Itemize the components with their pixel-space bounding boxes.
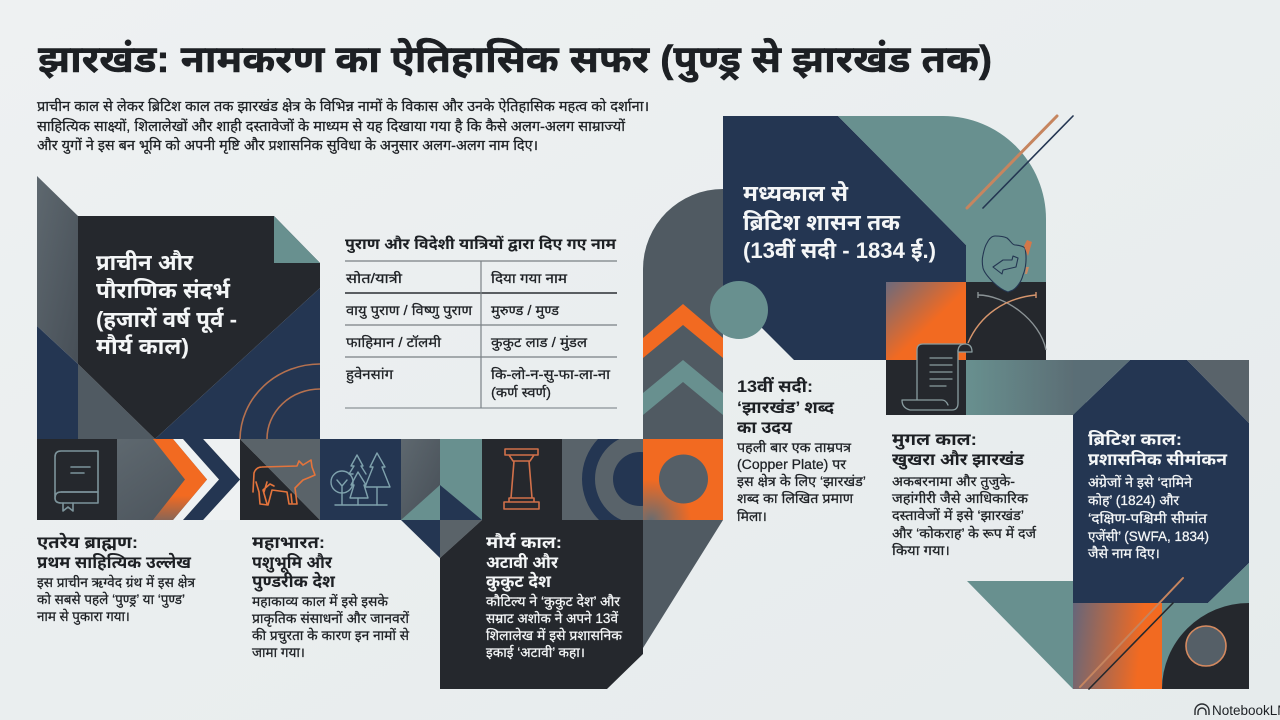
text block: Maurya period: शिलालेख में इसे प्रशासनिक — [486, 626, 623, 643]
panel heading: ancient: (हजारों वर्ष पूर्व - — [96, 307, 237, 334]
diagonal lines — [967, 116, 1073, 208]
teal chevron — [643, 360, 723, 415]
text block: Mughal period: किया गया। — [892, 542, 950, 558]
panel heading: medieval: मध्यकाल से — [743, 181, 849, 206]
text block: 13th century: मिला। — [737, 508, 767, 524]
icon: book — [55, 451, 98, 511]
text block: Maurya period: कौटिल्य ने ‘कुकुट देश’ और — [486, 592, 620, 611]
table: names given by puranas and travellers: (कर्ण स्वर्ण) — [491, 384, 551, 400]
text block: Mughal period: और ‘कोकराह’ के रूप में दर्ज — [892, 524, 1037, 541]
compass arcs — [968, 292, 1046, 350]
text block: Maurya period: इकाई ‘अटावी’ कहा। — [486, 644, 585, 660]
text block: Mahabharata: प्राकृतिक संसाधनों और जानवरों — [252, 610, 410, 628]
table: names given by puranas and travellers: फाहिमान / टॉलमी — [346, 334, 442, 350]
icon: scroll — [902, 344, 972, 410]
table: names given by puranas and travellers: पुराण और विदेशी यात्रियों द्वारा दिए गए नाम — [345, 235, 616, 254]
table: names given by puranas and travellers: कि-लो-न-सु-फा-ला-ना — [491, 366, 611, 384]
text block: Mahabharata: महाभारत: — [252, 533, 325, 552]
text block: Maurya period: कुकुट देश — [486, 571, 552, 592]
panel: Maurya dark card — [440, 520, 643, 689]
panel heading: medieval — [743, 181, 936, 263]
text block: British period: कोह’ (1824) और — [1088, 492, 1179, 508]
table: names given by puranas and travellers: कुकुट लाड / मुंडल — [491, 334, 588, 352]
diagonal lines — [1080, 578, 1183, 689]
panel heading: ancient: मौर्य काल) — [96, 334, 189, 359]
text block: Mahabharata: पुण्डरीक देश — [252, 571, 336, 592]
text block: British period: अंग्रेजों ने इसे ‘दामिने — [1088, 473, 1193, 490]
ring and dot — [582, 439, 643, 520]
panel heading: ancient: प्राचीन और — [96, 250, 194, 275]
text block: 13th century: इस क्षेत्र के लिए ‘झारखंड’ — [737, 472, 866, 489]
icon: cow — [253, 460, 315, 505]
table: names given by puranas and travellers: सोत/यात्री — [346, 270, 403, 286]
text block: British period: प्रशासनिक सीमांकन — [1088, 449, 1228, 469]
dark quarter circle — [1162, 603, 1249, 689]
intro paragraph — [37, 97, 649, 155]
text block: Mahabharata: जामा गया। — [252, 645, 305, 660]
text block: 13th century: का उदय — [737, 418, 793, 437]
lower shapes beneath band — [401, 520, 723, 689]
text block: 13th century — [737, 376, 866, 524]
text block: British period: ‘दक्षिण-पश्चिमी सीमांत — [1088, 510, 1207, 526]
icon: pillar — [504, 449, 539, 509]
text block: Aitareya Brahmana: इस प्राचीन ऋग्वेद ग्रंथ में इस क्षेत्र — [37, 573, 196, 590]
text block: Mughal period: मुगल काल: — [892, 430, 977, 450]
orange square with circle — [643, 439, 723, 520]
text block: Mahabharata — [252, 533, 410, 660]
text block: 13th century: 13वीं सदी: — [737, 376, 813, 396]
panel heading: ancient — [96, 250, 237, 359]
text block: Mughal period — [892, 430, 1037, 558]
text block: Aitareya Brahmana: को सबसे पहले ‘पुण्ड्र’ या ‘पुण्ड’ — [37, 590, 185, 609]
text block: Maurya period: अटावी और — [486, 552, 558, 572]
panel: ancient period background shapes — [37, 176, 320, 439]
icon: trees — [331, 453, 390, 505]
text block: British period: जैसे नाम दिए। — [1088, 544, 1160, 561]
chevrons — [153, 439, 240, 520]
text block: British period — [1088, 429, 1228, 561]
intro paragraph: और युगों ने इस बन भूमि को अपनी मृष्टि और प्रशासनिक सुविधा के अनुसार अलग-अलग नाम दिए। — [37, 136, 538, 155]
text block: Maurya period: सम्राट अशोक ने अपने 13वें — [486, 609, 618, 626]
text block: Mughal period: अकबरनामा और तुजुके- — [892, 472, 1015, 491]
text block: Aitareya Brahmana: एतरेय ब्राह्मण: — [37, 532, 138, 552]
text block: Aitareya Brahmana: नाम से पुकारा गया। — [37, 607, 130, 626]
orange arcs — [240, 364, 320, 439]
text block: Maurya period: मौर्य काल: — [486, 532, 562, 552]
intro paragraph: प्राचीन काल से लेकर ब्रिटिश काल तक झारखंड क्षेत्र के विभिन्न नामों के विकास और उनके ऐतिहासिक महत्व को दर्शाना। — [37, 97, 649, 114]
intro paragraph: साहित्यिक साक्ष्यों, शिलालेखों और शाही दस्तावेजों के माध्यम से यह दिखाया गया है कि कैसे अलग-अलग साम्राज्यों — [37, 117, 625, 134]
table: names given by puranas and travellers: हुवेनसांग — [346, 365, 393, 384]
text block: Maurya period — [486, 532, 623, 660]
vertical connector column — [643, 189, 723, 439]
text block: Mughal period: जहांगीरी जैसे आधिकारिक — [892, 489, 1029, 506]
icon: map — [982, 236, 1032, 292]
text block: 13th century: ‘झारखंड’ शब्द — [737, 398, 834, 417]
orange chevron — [643, 304, 723, 358]
table: names given by puranas and travellers: मुरुण्ड / मुण्ड — [491, 303, 560, 320]
timeline band — [37, 439, 723, 520]
panel: medieval to British — [710, 116, 1073, 415]
panel: right area shapes — [966, 360, 1249, 689]
text block: British period: ब्रिटिश काल: — [1088, 429, 1182, 449]
panel heading: medieval: ब्रिटिश शासन तक — [743, 210, 901, 235]
text block: Aitareya Brahmana: प्रथम साहित्यिक उल्लेख — [37, 552, 192, 572]
text block: 13th century: पहली बार एक ताम्रपत्र — [737, 439, 852, 455]
text block: 13th century: (Copper Plate) पर — [737, 457, 846, 472]
text block: Mughal period: खुखरा और झारखंड — [892, 449, 1024, 470]
text block: Mahabharata: महाकाव्य काल में इसे इसके — [252, 592, 389, 609]
table: names given by puranas and travellers: वायु पुराण / विष्णु पुराण — [346, 302, 472, 320]
text block: Mahabharata: की प्रचुरता के कारण इन नामों से — [252, 626, 410, 645]
text block: 13th century: शब्द का लिखित प्रमाण — [737, 490, 853, 506]
orange gradient square — [886, 282, 966, 360]
table: names given by puranas and travellers — [345, 235, 617, 408]
text block: Mahabharata: पशुभूमि और — [252, 552, 332, 574]
text block: British period: एजेंसी’ (SWFA, 1834) — [1088, 528, 1209, 544]
panel heading: ancient: पौराणिक संदर्भ — [96, 278, 231, 303]
title: झारखंड: नामकरण का ऐतिहासिक सफर (पुण्ड्र से झारखंड तक) — [38, 37, 992, 83]
text block: Aitareya Brahmana — [37, 532, 196, 626]
panel heading: medieval: (13वीं सदी - 1834 ई.) — [743, 238, 936, 263]
table: names given by puranas and travellers: दिया गया नाम — [491, 270, 568, 286]
text block: Mughal period: दस्तावेजों में इसे ‘झारखंड’ — [892, 506, 1024, 523]
